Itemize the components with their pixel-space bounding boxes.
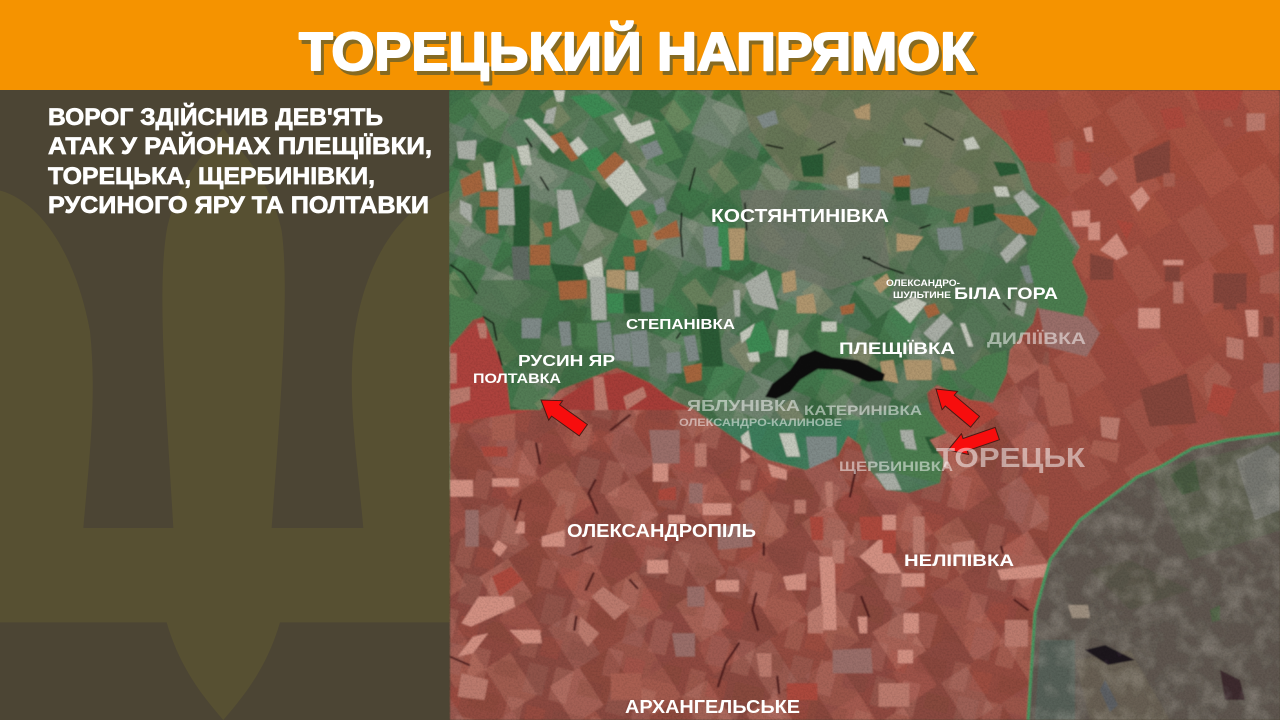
patches: bright red near Poltavka	[450, 317, 690, 423]
label: Shcherbynivka: ЩЕРБИНІВКА	[839, 458, 953, 474]
label: Bila Hora: БІЛА ГОРА	[954, 284, 1058, 303]
label: Oleksandropil: ОЛЕКСАНДРОПІЛЬ	[567, 521, 756, 541]
texture: satellite grain	[449, 90, 1280, 720]
text block: attack summary	[48, 103, 432, 219]
label: Diliivka: ДИЛІЇВКА	[987, 329, 1086, 348]
panel: left info background	[0, 90, 450, 720]
header: orange title bar	[0, 0, 1280, 90]
label: Oleksandro-Shultyne: ОЛЕКСАНДРО-	[886, 278, 960, 289]
label: Stepanivka: СТЕПАНІВКА	[626, 317, 736, 333]
arrow: attack toward Pleshchiivka	[928, 380, 983, 431]
patches: tiled occupied fields	[449, 90, 1280, 720]
label: Yablunivka: ЯБЛУНІВКА	[687, 398, 801, 415]
field blocks, east of Kostiantynivka	[860, 103, 1087, 483]
label: Oleksandro-Kalynove: ОЛЕКСАНДРО-КАЛИНОВЕ	[679, 417, 842, 429]
map labels	[473, 206, 1086, 717]
region: Russian-occupied territory	[449, 90, 1280, 720]
label: Rusyn Yar: РУСИН ЯР	[518, 353, 615, 370]
label: Arkhanhelske: АРХАНГЕЛЬСЬКЕ	[625, 697, 800, 717]
region: occupied Donetsk side	[1028, 430, 1280, 720]
label: Kostiantynivka: КОСТЯНТИНІВКА	[711, 206, 889, 226]
text block: attack summary: ТОРЕЦЬКА, ЩЕРБИНІВКИ,	[48, 163, 375, 190]
text block: attack summary: РУСИНОГО ЯРУ ТА ПОЛТАВКИ	[48, 192, 429, 219]
label: Oleksandro-Shultyne: ШУЛЬТИНЕ	[893, 290, 951, 301]
field blocks, southern Ukrainian pocket	[741, 430, 944, 490]
label: Toretsk: ТОРЕЦЬК	[936, 442, 1086, 473]
map area: Ukrainian-held natural terrain	[449, 90, 1088, 494]
label: Oleksandro-Shultyne	[886, 278, 960, 301]
label: Katerynivka: КАТЕРИНІВКА	[804, 402, 922, 418]
label: Poltavka: ПОЛТАВКА	[473, 371, 561, 386]
water: ponds and streams	[451, 138, 870, 365]
arrow: attack toward Poltavka	[534, 390, 590, 440]
text block: attack summary: ВОРОГ ЗДІЙСНИВ ДЕВ'ЯТЬ	[48, 103, 383, 131]
text block: attack summary: АТАК У РАЙОНАХ ПЛЕЩІЇВКИ,	[48, 132, 432, 160]
arrow: attack toward Shcherbynivka	[944, 423, 1001, 460]
water: Kleban-Byk reservoir	[765, 350, 885, 399]
water: eastern streams	[863, 92, 1010, 310]
map: satellite terrain	[449, 90, 1280, 720]
title: ТОРЕЦЬКИЙ НАПРЯМОК	[299, 21, 975, 82]
icon: trident watermark	[0, 128, 450, 720]
field blocks, west of Kostiantynivka	[450, 90, 870, 383]
label: Pleshchiivka: ПЛЕЩІЇВКА	[839, 339, 955, 358]
patches: north-east occupied fields	[928, 90, 1280, 463]
label: Nelipivka: НЕЛІПІВКА	[904, 551, 1014, 570]
patches: south occupied fields	[450, 403, 1050, 707]
